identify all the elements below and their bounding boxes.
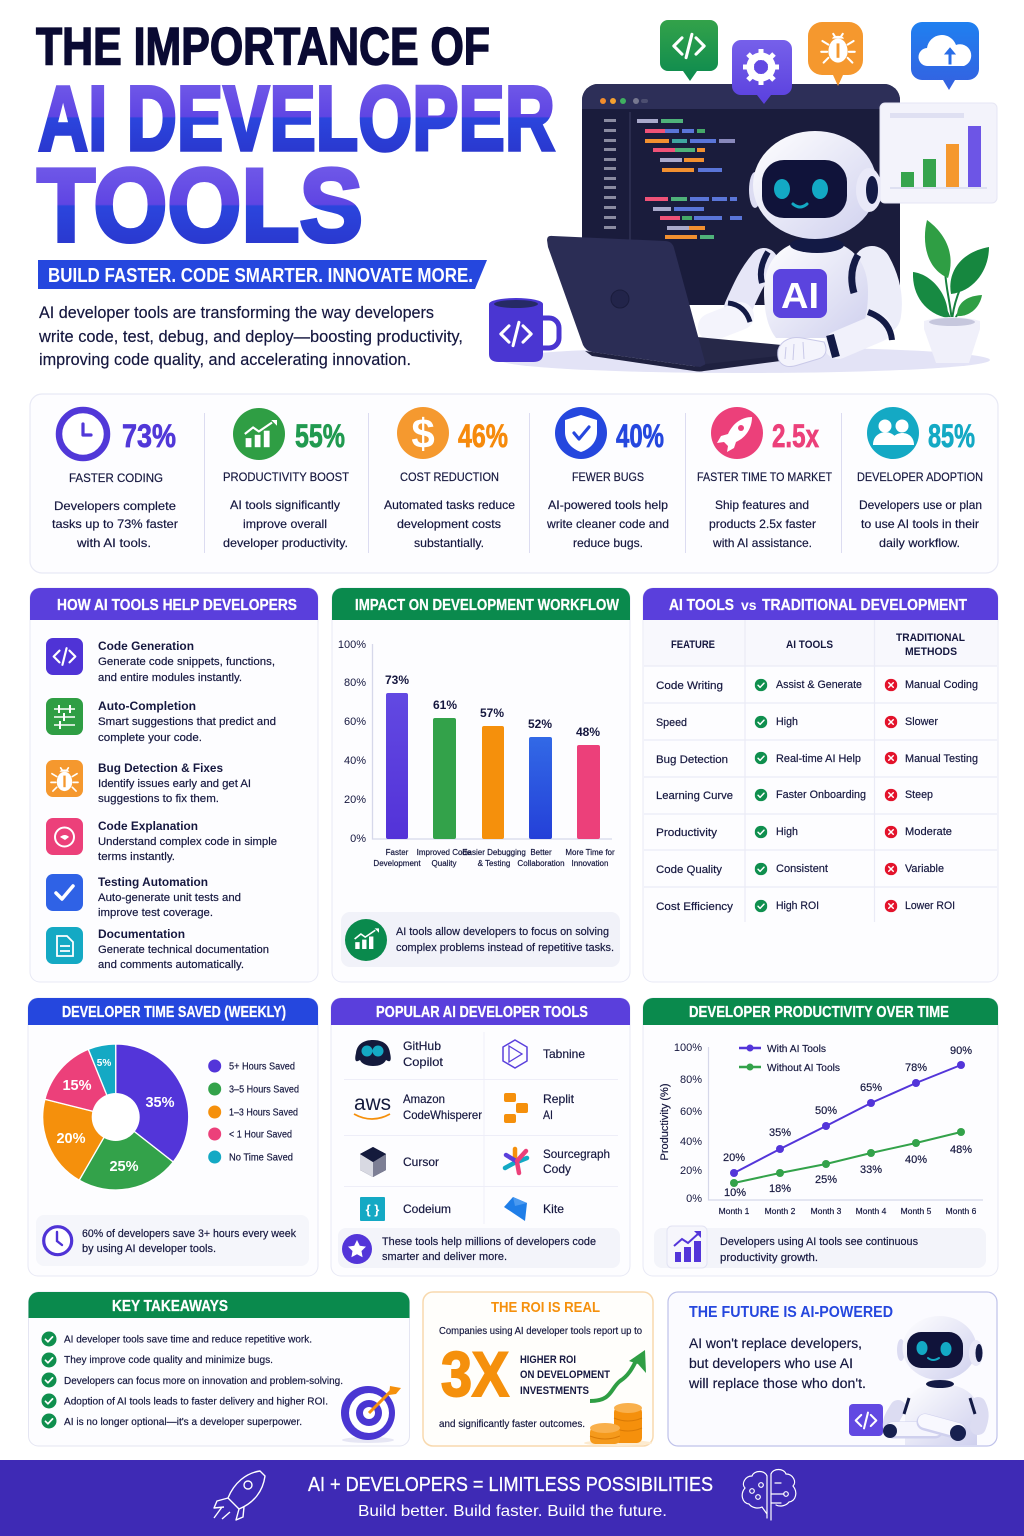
table rows — [656, 679, 978, 913]
intro paragraph — [38, 303, 463, 369]
stat: fewer bugs 40%: FEWER BUGS — [572, 470, 644, 484]
panel: how AI tools help developers: HOW AI TOOLS HELP DEVELOPERS — [57, 597, 297, 614]
chart legend — [739, 1043, 840, 1074]
line chart: 33% — [860, 1164, 882, 1176]
tool: Replit AI — [504, 1092, 575, 1123]
table rows: Consistent — [776, 863, 828, 875]
icon: gear bubble — [732, 40, 792, 104]
table rows: Variable — [905, 863, 944, 875]
panel: key takeaways — [28, 1292, 410, 1446]
callout: 60% of developers: 60% of developers save 3+ hours every week — [82, 1228, 296, 1240]
icon: target with arrow — [341, 1386, 401, 1443]
takeaway list: Developers can focus more on innovation and problem-solving. — [64, 1375, 343, 1387]
line chart: Month 5 — [901, 1206, 932, 1216]
panel: developer productivity over time: DEVELOPER PRODUCTIVITY OVER TIME — [689, 1004, 949, 1021]
bar chart: 48% — [576, 725, 600, 739]
illustration: floating chart card — [880, 103, 997, 203]
bar chart: 61% — [433, 698, 457, 712]
bar chart: Development — [373, 859, 421, 868]
pie chart: 35% — [145, 1095, 175, 1111]
tool: Amazon CodeWhisperer — [354, 1092, 482, 1122]
stat: developer adoption 85%: DEVELOPER ADOPTION — [857, 470, 983, 484]
illustration: laptop — [547, 236, 800, 372]
icon: code mug — [489, 298, 559, 362]
panel: key takeaways: KEY TAKEAWAYS — [112, 1298, 228, 1315]
pie chart: 20% — [56, 1131, 86, 1147]
table rows: Slower — [905, 716, 938, 728]
item: documentation — [46, 927, 269, 971]
stat: cost reduction 46%: substantially. — [414, 536, 484, 550]
tool: Amazon CodeWhisperer: aws — [354, 1092, 391, 1115]
item: code generation: and entire modules instantly. — [98, 672, 242, 684]
bar chart: Innovation — [572, 859, 608, 868]
icon: brain — [742, 1470, 796, 1520]
tagline banner: BUILD FASTER. CODE SMARTER. INNOVATE MORE. — [48, 264, 473, 287]
bar chart: Faster — [386, 848, 409, 857]
higher ROI text: INVESTMENTS — [520, 1385, 589, 1397]
bar chart: More Time for — [565, 848, 615, 857]
tool: Kite — [504, 1197, 564, 1221]
quote text: AI won't replace developers, — [689, 1336, 862, 1351]
table rows: Manual Testing — [905, 753, 978, 765]
tool: GitHub Copilot: Copilot — [403, 1055, 444, 1069]
panel: AI tools vs traditional development: AI TOOLS — [669, 597, 734, 614]
panel: the ROI is real: and significantly faster outcomes. — [439, 1418, 585, 1430]
stat: faster coding 73%: 73% — [122, 418, 176, 454]
tool: Cursor: Cursor — [403, 1155, 439, 1169]
item: auto-completion: complete your code. — [98, 732, 202, 744]
line chart: 60% — [680, 1106, 702, 1118]
illustration: robot forearm and hand — [778, 312, 892, 366]
takeaway list: AI developer tools save time and reduce repetitive work. — [64, 1334, 312, 1346]
line chart: 65% — [860, 1082, 882, 1094]
table rows: High ROI — [776, 900, 819, 912]
table rows: Learning Curve — [656, 790, 733, 802]
item: testing automation: Testing Automation — [98, 875, 208, 889]
takeaway list: AI is no longer optional—it's a developer superpower. — [64, 1416, 302, 1428]
footer banner: AI + DEVELOPERS = LIMITLESS POSSIBILITIES — [308, 1474, 713, 1496]
pie legend: 5+ Hours Saved — [229, 1060, 295, 1072]
line chart: Month 2 — [765, 1206, 796, 1216]
tool: Amazon CodeWhisperer: CodeWhisperer — [403, 1108, 482, 1122]
line chart: 40% — [680, 1136, 702, 1148]
item: bug detection and fixes: Identify issues early and get AI — [98, 778, 251, 790]
line chart: 20% — [723, 1152, 745, 1164]
footer banner — [0, 1460, 1024, 1536]
stat: cost reduction 46%: Automated tasks reduce — [384, 498, 515, 512]
tool: Kite: Kite — [543, 1202, 564, 1216]
tool: Sourcegraph Cody — [505, 1147, 610, 1176]
quote text — [688, 1336, 866, 1391]
bar chart — [338, 639, 615, 868]
stat: faster coding 73%: with AI tools. — [76, 536, 151, 550]
line chart: 20% — [680, 1165, 702, 1177]
tool: Tabnine — [503, 1040, 585, 1068]
callout: continuous productivity growth: productivity growth. — [720, 1252, 818, 1264]
stat: productivity boost 55%: AI tools significantly — [230, 498, 340, 512]
bar chart: 40% — [344, 755, 366, 767]
item: auto-completion: Smart suggestions that predict and — [98, 716, 276, 728]
table header: TRADITIONAL — [896, 632, 965, 644]
stat: faster time to market 2.5x: 2.5x — [772, 418, 819, 454]
panel: popular AI developer tools: POPULAR AI DEVELOPER TOOLS — [376, 1004, 588, 1021]
illustration: monitor with code — [582, 84, 900, 305]
panel: the ROI is real — [423, 1292, 653, 1446]
bar chart: 60% — [344, 716, 366, 728]
line chart: 0% — [686, 1193, 702, 1205]
table rows: Manual Coding — [905, 679, 978, 691]
stat: cost reduction 46%: development costs — [397, 517, 501, 531]
item: bug detection and fixes: Bug Detection & Fixes — [98, 761, 223, 775]
item: auto-completion — [46, 698, 276, 744]
tool: Codeium: Codeium — [403, 1202, 451, 1216]
tool: Amazon CodeWhisperer: Amazon — [403, 1092, 445, 1106]
intro paragraph: improving code quality, and accelerating innovation. — [39, 350, 411, 369]
panel: AI tools vs traditional development: vs — [741, 597, 757, 613]
item: bug detection and fixes: suggestions to fix them. — [98, 793, 219, 805]
title — [36, 18, 555, 264]
stat: fewer bugs 40%: 40% — [616, 418, 664, 454]
hero illustration — [489, 20, 997, 373]
bar chart: 80% — [344, 677, 366, 689]
illustration: robot body — [712, 237, 883, 338]
pie legend: < 1 Hour Saved — [229, 1128, 292, 1140]
table rows: Assist & Generate — [776, 679, 862, 691]
callout: 60% of developers — [36, 1215, 309, 1266]
tool: Tabnine: Tabnine — [543, 1047, 585, 1061]
tool: GitHub Copilot: GitHub — [403, 1039, 441, 1053]
illustration: robot with crossed arms — [883, 1316, 983, 1445]
line chart: Productivity (%) — [659, 1083, 671, 1161]
item: testing automation — [46, 874, 241, 919]
bar chart: 57% — [480, 706, 504, 720]
table rows: Steep — [905, 789, 933, 801]
higher ROI text: HIGHER ROI — [520, 1354, 576, 1366]
bar chart: 73% — [385, 673, 409, 687]
bar chart: Improved Code — [417, 848, 472, 857]
tool: Codeium: { } — [366, 1202, 379, 1217]
line chart: 50% — [815, 1105, 837, 1117]
stat: faster coding 73%: FASTER CODING — [69, 471, 163, 485]
callout: tools help millions: smarter and deliver more. — [382, 1251, 507, 1263]
line chart: Month 1 — [719, 1206, 750, 1216]
line chart: 90% — [950, 1045, 972, 1057]
illustration: desk shadow — [500, 347, 990, 373]
icon: growth arrow — [590, 1350, 646, 1401]
stat: faster time to market 2.5x — [697, 407, 833, 550]
title: AI DEVELOPER — [38, 68, 555, 170]
table rows: Lower ROI — [905, 900, 955, 912]
stat: faster coding 73%: tasks up to 73% faster — [52, 517, 178, 531]
line chart: 18% — [769, 1183, 791, 1195]
line chart: Month 4 — [856, 1206, 887, 1216]
pie legend: 3–5 Hours Saved — [229, 1084, 299, 1096]
stat: faster time to market 2.5x: Ship features and — [715, 498, 809, 512]
stat: cost reduction 46%: $ — [411, 410, 435, 457]
bar chart: 52% — [528, 717, 552, 731]
stat: developer adoption 85% — [857, 407, 983, 550]
line chart: Month 3 — [811, 1206, 842, 1216]
item: code generation: Code Generation — [98, 639, 194, 653]
callout: 60% of developers: by using AI developer tools. — [82, 1243, 216, 1255]
stat: developer adoption 85%: 85% — [928, 418, 975, 454]
stat: faster time to market 2.5x: FASTER TIME TO MARKET — [697, 470, 833, 484]
line chart: 25% — [815, 1174, 837, 1186]
panel: AI tools vs traditional development: TRADITIONAL DEVELOPMENT — [762, 597, 967, 614]
line chart: 80% — [680, 1074, 702, 1086]
stat: cost reduction 46%: COST REDUCTION — [400, 470, 499, 484]
item: code explanation: terms instantly. — [98, 851, 175, 863]
callout: tools help millions — [338, 1228, 620, 1268]
table header — [671, 632, 965, 658]
pie chart: 15% — [62, 1078, 92, 1094]
callout: continuous productivity growth: Developers using AI tools see continuous — [720, 1236, 918, 1248]
icon: code bubble — [660, 20, 718, 81]
stat: fewer bugs 40%: reduce bugs. — [573, 536, 643, 550]
pie chart: 5% — [97, 1058, 111, 1069]
stat: faster coding 73%: Developers complete — [54, 499, 176, 513]
line chart: 10% — [724, 1187, 746, 1199]
table rows: Bug Detection — [656, 754, 728, 766]
quote text: will replace those who don't. — [688, 1376, 866, 1391]
table rows: Cost Efficiency — [656, 901, 734, 913]
table rows: Speed — [656, 717, 687, 729]
illustration: robot head — [749, 131, 882, 239]
table rows: High — [776, 826, 798, 838]
table rows: Moderate — [905, 826, 952, 838]
panel: impact on development workflow: IMPACT ON DEVELOPMENT WORKFLOW — [355, 597, 620, 614]
table rows: Productivity — [656, 827, 718, 839]
line chart — [659, 1042, 983, 1216]
icon: bug bubble — [808, 22, 863, 86]
bar chart: Easier Debugging — [462, 848, 526, 857]
quote text: but developers who use AI — [689, 1356, 853, 1371]
illustration: plant — [913, 220, 989, 363]
line chart: 100% — [674, 1042, 702, 1054]
chart legend: Without AI Tools — [767, 1062, 840, 1074]
bar chart: 100% — [338, 639, 366, 651]
line chart: 78% — [905, 1062, 927, 1074]
stat: faster time to market 2.5x: products 2.5x faster — [709, 517, 816, 531]
item: bug detection and fixes — [46, 760, 251, 805]
bar chart: Collaboration — [517, 859, 565, 868]
title: TOOLS — [37, 148, 363, 264]
panel: popular AI developer tools — [331, 998, 630, 1276]
callout: continuous productivity growth — [654, 1226, 986, 1268]
higher ROI text: ON DEVELOPMENT — [520, 1369, 610, 1381]
takeaway list: Adoption of AI tools leads to faster delivery and higher ROI. — [64, 1396, 328, 1408]
table rows: Code Writing — [656, 680, 723, 692]
item: code explanation — [46, 818, 277, 863]
stat: productivity boost 55%: PRODUCTIVITY BOOST — [223, 470, 350, 484]
stat: fewer bugs 40%: write cleaner code and — [546, 517, 669, 531]
panel: the ROI is real: THE ROI IS REAL — [491, 1299, 600, 1316]
tool: Replit AI: Replit — [543, 1092, 575, 1106]
stat: faster coding 73% — [52, 410, 178, 550]
stat: developer adoption 85%: to use AI tools in their — [861, 517, 979, 531]
table rows: Code Quality — [656, 864, 723, 876]
stat: productivity boost 55%: 55% — [295, 418, 345, 454]
callout: tools help millions: These tools help millions of developers code — [382, 1236, 596, 1248]
table header: FEATURE — [671, 639, 715, 651]
item: code generation: Generate code snippets, functions, — [98, 656, 275, 668]
takeaway list: They improve code quality and minimize bugs. — [64, 1354, 273, 1366]
icon: coins — [584, 1403, 652, 1446]
table header: AI TOOLS — [786, 639, 833, 651]
bar chart: Quality — [432, 859, 456, 868]
icon: code tile — [849, 1404, 883, 1436]
line chart: 48% — [950, 1144, 972, 1156]
bar chart: 0% — [350, 833, 366, 845]
item: testing automation: improve test coverage. — [98, 907, 213, 919]
panel: key statistics — [30, 394, 998, 573]
footer banner: Build better. Build faster. Build the future. — [358, 1503, 667, 1520]
item: testing automation: Auto-generate unit tests and — [98, 892, 241, 904]
panel: impact on development workflow — [332, 588, 630, 982]
stat: cost reduction 46%: 46% — [458, 418, 508, 454]
item: documentation: Generate technical documentation — [98, 944, 269, 956]
table rows: Faster Onboarding — [776, 789, 866, 801]
item: auto-completion: Auto-Completion — [98, 699, 196, 713]
icon: rocket — [214, 1471, 265, 1520]
item: documentation: and comments automatically. — [98, 959, 244, 971]
pie chart — [43, 1044, 189, 1190]
stat: fewer bugs 40%: AI-powered tools help — [548, 498, 668, 512]
bar chart: 20% — [344, 794, 366, 806]
intro paragraph: write code, test, debug, and deploy—boosting productivity, — [38, 327, 463, 346]
table rows: High — [776, 716, 798, 728]
tool: Sourcegraph Cody: Sourcegraph — [543, 1147, 610, 1161]
pie legend — [208, 1060, 299, 1164]
stat: developer adoption 85%: Developers use or plan — [859, 498, 982, 512]
stat: productivity boost 55%: developer productivity. — [223, 536, 348, 550]
takeaway list — [42, 1332, 343, 1428]
panel: developer time saved (weekly) — [28, 998, 318, 1276]
panel: the future is AI-powered — [668, 1292, 997, 1446]
panel: the ROI is real: Companies using AI developer tools report up to — [439, 1325, 642, 1337]
tagline banner — [38, 260, 487, 289]
stat: fewer bugs 40% — [546, 407, 669, 550]
tool: GitHub Copilot — [355, 1039, 444, 1069]
line chart: 40% — [905, 1154, 927, 1166]
panel: developer time saved (weekly): DEVELOPER TIME SAVED (WEEKLY) — [62, 1004, 286, 1021]
intro paragraph: AI developer tools are transforming the way developers — [39, 303, 434, 322]
stat: 3X: 3X — [441, 1340, 509, 1410]
panel: AI tools vs traditional development — [643, 588, 998, 982]
stat: productivity boost 55%: improve overall — [243, 517, 327, 531]
table header: METHODS — [905, 646, 957, 658]
higher ROI text — [520, 1354, 610, 1397]
tool: Replit AI: AI — [543, 1108, 553, 1122]
pie legend: 1–3 Hours Saved — [229, 1106, 298, 1118]
callout: focus on solving problems: complex problems instead of repetitive tasks. — [396, 942, 614, 954]
stat: productivity boost 55% — [223, 408, 350, 550]
item: code generation — [46, 638, 275, 684]
bar chart: & Testing — [478, 859, 510, 868]
panel: how AI tools help developers — [30, 588, 318, 982]
icon: cloud upload bubble — [911, 22, 979, 90]
item: code explanation: Code Explanation — [98, 819, 198, 833]
pie legend: No Time Saved — [229, 1152, 293, 1164]
callout: focus on solving problems: AI tools allow developers to focus on solving — [396, 926, 609, 938]
line chart: Month 6 — [946, 1206, 977, 1216]
stat: faster time to market 2.5x: with AI assistance. — [712, 536, 812, 550]
bar chart: Better — [530, 848, 552, 857]
tool: Sourcegraph Cody: Cody — [543, 1162, 571, 1176]
illustration: robot body: AI — [781, 275, 819, 316]
pie chart: 25% — [109, 1159, 139, 1175]
item: code explanation: Understand complex code in simple — [98, 836, 277, 848]
panel: the future is AI-powered: THE FUTURE IS AI-POWERED — [689, 1304, 893, 1321]
chart legend: With AI Tools — [767, 1043, 826, 1055]
callout: focus on solving problems — [341, 912, 620, 967]
stat: developer adoption 85%: daily workflow. — [879, 536, 960, 550]
title: THE IMPORTANCE OF — [36, 18, 490, 76]
panel: developer productivity over time — [643, 998, 998, 1276]
table rows: Real-time AI Help — [776, 753, 861, 765]
tool: Cursor — [360, 1147, 439, 1177]
item: documentation: Documentation — [98, 927, 185, 941]
stat: cost reduction 46% — [384, 407, 515, 550]
tool: Codeium — [360, 1197, 451, 1221]
line chart: 35% — [769, 1127, 791, 1139]
